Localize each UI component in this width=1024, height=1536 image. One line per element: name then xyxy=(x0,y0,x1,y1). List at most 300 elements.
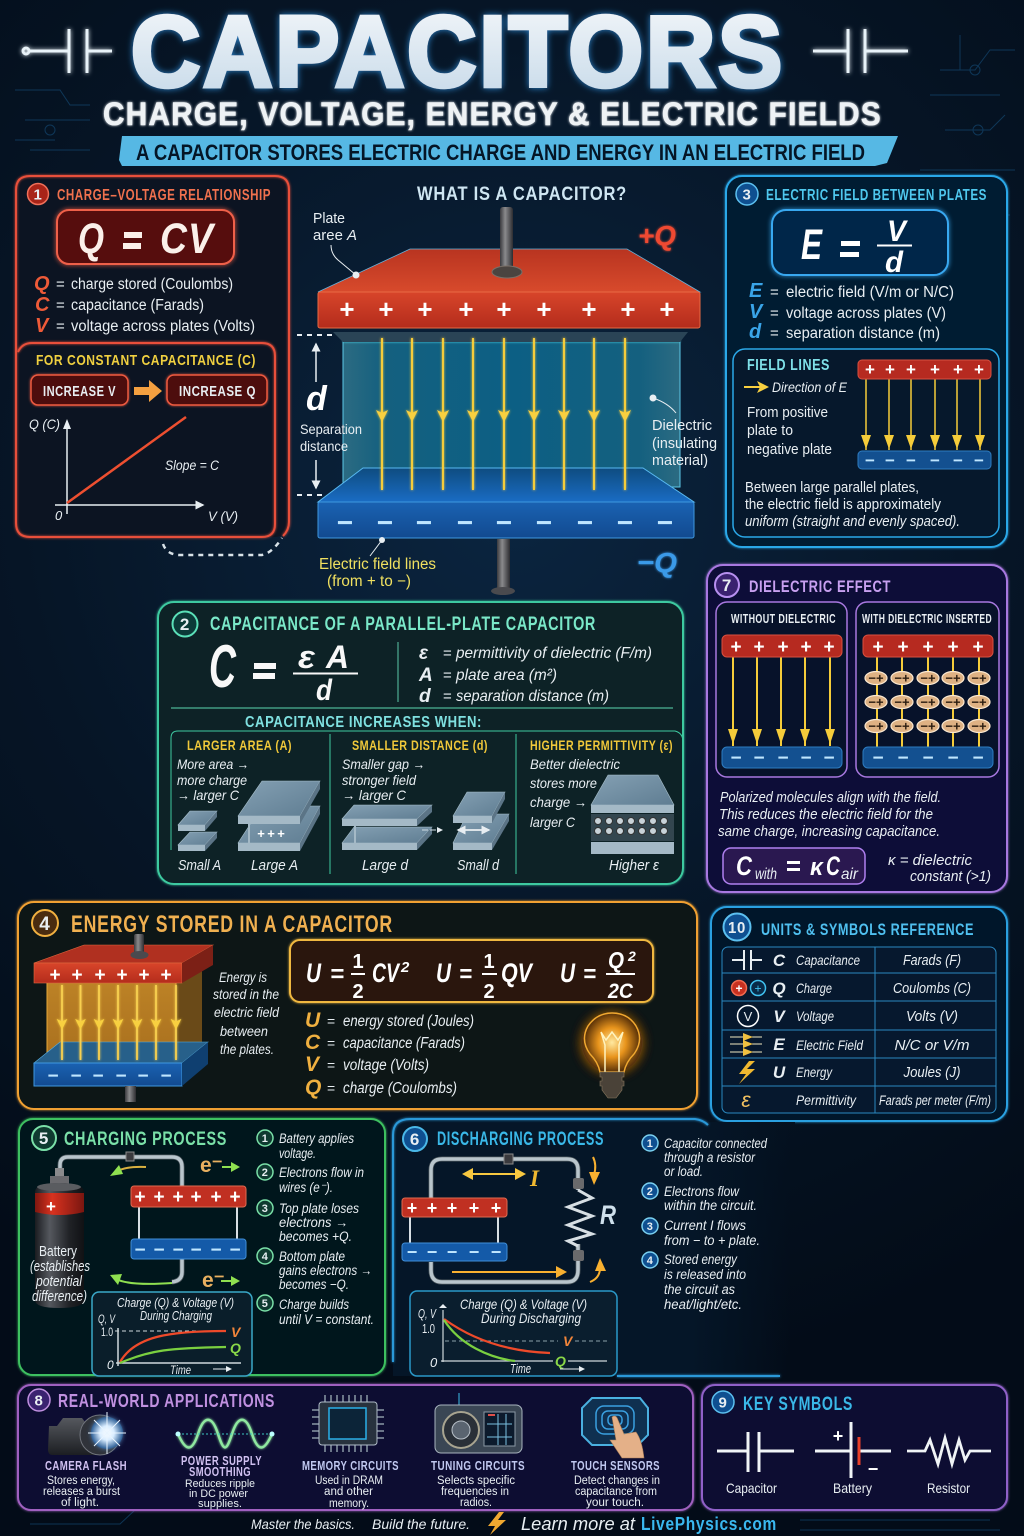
energy formulas: QV xyxy=(501,958,534,988)
polarized molecules: −+ xyxy=(920,694,936,710)
column: higher permittivity: stores more xyxy=(530,775,597,791)
application: memory circuits: memory. xyxy=(329,1498,369,1510)
row: voltage: V xyxy=(773,1007,786,1026)
application: camera flash: CAMERA FLASH xyxy=(45,1459,127,1473)
kappa note: κ = dielectric xyxy=(888,853,973,869)
discharging chart: Charge (Q) & Voltage (V) xyxy=(460,1296,587,1312)
row: capacitance: C xyxy=(773,951,786,970)
column: smaller distance: Large d xyxy=(362,857,409,874)
polarized molecules: −+ xyxy=(945,718,961,734)
application: power supply smoothing: POWER SUPPLY xyxy=(181,1454,262,1468)
separation distance marker: d xyxy=(306,380,328,418)
polarized molecules: −+ xyxy=(868,694,884,710)
number badge 2: 2 xyxy=(180,615,190,634)
separation distance marker: distance xyxy=(300,438,348,454)
polarized molecules: −+ xyxy=(894,670,910,686)
charging steps: wires (e⁻). xyxy=(279,1180,333,1195)
dielectric block xyxy=(333,332,688,487)
charging steps: 1 xyxy=(262,1133,268,1145)
heading: DIELECTRIC EFFECT xyxy=(749,577,891,596)
units table xyxy=(722,947,996,1113)
application: tuning circuits xyxy=(431,1393,525,1509)
application: tuning circuits: frequencies in xyxy=(441,1486,509,1498)
charging steps: Battery applies xyxy=(279,1131,354,1146)
column: larger area xyxy=(177,737,320,874)
row: permittivity xyxy=(741,1089,991,1112)
discharging chart: Q, V xyxy=(418,1306,437,1321)
charging steps: until V = constant. xyxy=(279,1312,374,1327)
polarized molecules: −+ xyxy=(894,718,910,734)
variable definitions: voltage across plates (Volts) xyxy=(71,318,255,335)
Q-V line chart xyxy=(29,416,238,524)
row: energy: Energy xyxy=(796,1064,833,1080)
variable definitions: energy stored (Joules) xyxy=(343,1013,474,1030)
number badge 1: 1 xyxy=(33,186,43,204)
column: smaller distance: Smaller gap → xyxy=(342,756,425,772)
formula C = eA/d: ε xyxy=(298,639,316,675)
plates with dielectric xyxy=(591,775,674,854)
variable definitions: ε xyxy=(419,643,429,664)
column: larger area: More area → xyxy=(177,756,249,772)
application: tuning circuits: TUNING CIRCUITS xyxy=(431,1459,525,1473)
application: camera flash xyxy=(43,1412,127,1509)
icon: battery xyxy=(30,1168,90,1308)
icon: memory chip xyxy=(312,1395,384,1452)
column: smaller distance: → larger C xyxy=(342,787,407,803)
symbol: resistor: Resistor xyxy=(927,1480,970,1496)
formula with dielectric: C xyxy=(826,851,840,881)
panel: 8 real-world applications xyxy=(18,1385,693,1510)
formula C = eA/d: C xyxy=(209,633,237,700)
Q-V line chart: V (V) xyxy=(208,508,238,524)
row: energy: U xyxy=(773,1063,786,1082)
electric field label: Electric field lines xyxy=(319,556,436,573)
variable definitions: = xyxy=(770,305,779,322)
large gap plates xyxy=(342,805,442,850)
symbol: resistor xyxy=(907,1438,991,1496)
field lines sub-panel xyxy=(733,349,999,537)
formula Q = CV: C xyxy=(160,215,188,263)
number badge 8: 8 xyxy=(34,1392,44,1410)
formula Q = CV: V xyxy=(188,215,216,263)
formula with dielectric: with xyxy=(755,866,777,883)
without dielectric diagram: WITHOUT DIELECTRIC xyxy=(731,612,836,626)
-Q label: −Q xyxy=(637,547,677,578)
panel: 7 dielectric effect xyxy=(707,565,1007,892)
symbol: battery xyxy=(815,1422,891,1496)
application: power supply smoothing: SMOOTHING xyxy=(189,1465,251,1479)
explanation: Polarized molecules align with the field. xyxy=(720,790,941,806)
discharging circuit: I xyxy=(529,1166,540,1191)
charging steps xyxy=(257,1130,374,1327)
dielectric label: material) xyxy=(652,452,708,469)
energy note: the plates. xyxy=(220,1041,274,1057)
polarized molecules: −+ xyxy=(920,718,936,734)
variable definitions xyxy=(749,280,954,343)
heading: WHAT IS A CAPACITOR? xyxy=(417,184,627,205)
charging steps: Charge builds xyxy=(279,1297,349,1312)
large plates: +++ xyxy=(257,826,285,841)
divider xyxy=(397,642,399,702)
formula with dielectric: κ xyxy=(810,854,824,881)
discharging steps: Capacitor connected xyxy=(664,1136,767,1151)
explanation xyxy=(718,790,941,840)
energy formulas: U xyxy=(560,958,576,988)
variable definitions: voltage across plates (V) xyxy=(786,305,946,322)
panel: what is a capacitor xyxy=(297,184,717,595)
small gap plates xyxy=(453,792,509,850)
increase V box: INCREASE V xyxy=(43,384,116,400)
number badge 6: 6 xyxy=(410,1130,420,1149)
number badge 10 xyxy=(724,914,750,940)
variable definitions: separation distance (m) xyxy=(786,325,940,342)
lower plate: −−−−−−−−− xyxy=(337,507,673,538)
charging steps: becomes −Q. xyxy=(279,1277,349,1292)
number badge 9 xyxy=(712,1391,734,1413)
charging chart: Q, V xyxy=(98,1312,116,1326)
discharging steps: within the circuit. xyxy=(664,1198,757,1213)
variable definitions: = xyxy=(770,284,779,301)
row: voltage: V xyxy=(744,1009,753,1024)
charging steps: voltage. xyxy=(279,1146,316,1161)
title block xyxy=(23,0,908,166)
number badge 7 xyxy=(715,573,739,597)
increase Q box xyxy=(167,375,267,405)
panel: 2 capacitance of parallel plate capacitor xyxy=(158,602,683,884)
variable definitions: permittivity of dielectric (F/m) xyxy=(455,645,652,662)
energy formulas: 2 xyxy=(352,981,364,1003)
discharging steps: Electrons flow xyxy=(664,1184,740,1199)
number badge 8 xyxy=(28,1389,50,1411)
increase Q box: INCREASE Q xyxy=(179,384,256,400)
electron flow arrows xyxy=(116,1167,146,1172)
row: electric field: E xyxy=(773,1035,785,1054)
energy note xyxy=(213,969,280,1057)
charging chart: 1.0 xyxy=(101,1327,113,1339)
variable definitions: = xyxy=(56,297,65,314)
application: power supply smoothing xyxy=(176,1420,274,1510)
discharging steps: through a resistor xyxy=(664,1150,755,1165)
Q-V line chart: Slope = C xyxy=(165,458,219,473)
charging chart: Q xyxy=(230,1340,241,1356)
discharging chart: 1.0 xyxy=(422,1321,435,1336)
banner: A CAPACITOR STORES ELECTRIC CHARGE AND ENERGY IN AN ELECTRIC FIELD xyxy=(136,140,865,165)
discharging steps: 1 xyxy=(647,1138,653,1150)
symbol: battery: Battery xyxy=(833,1480,872,1496)
charging circuit: e⁻ xyxy=(200,1154,223,1177)
icon: sine wave xyxy=(176,1420,274,1448)
symbol: battery: − xyxy=(868,1459,878,1479)
row: charge: + xyxy=(754,982,762,996)
energy formulas: 2 xyxy=(483,981,495,1003)
footer: Learn more at xyxy=(521,1514,636,1534)
energy formulas: 2C xyxy=(607,980,634,1003)
charging circuit xyxy=(60,1152,246,1292)
field lines sub-panel: Between large parallel plates, xyxy=(745,480,919,496)
amber capacitor illustration: ++++++ xyxy=(49,965,172,986)
variable definitions: = xyxy=(327,1057,335,1073)
variable definitions: E xyxy=(749,280,763,302)
polarized molecules xyxy=(865,670,990,734)
energy formulas: Q xyxy=(608,947,624,973)
polarized molecules: −+ xyxy=(920,670,936,686)
dielectric label: Dielectric xyxy=(652,417,712,434)
number badge 9: 9 xyxy=(718,1394,728,1412)
mini field diagram: ++++++ xyxy=(865,360,984,379)
plate area label: aree A xyxy=(313,227,357,244)
column: smaller distance: Small d xyxy=(457,857,500,874)
column: smaller distance xyxy=(342,737,509,874)
formula Q = CV xyxy=(57,210,234,264)
variable definitions xyxy=(418,643,652,707)
charging steps: 2 xyxy=(262,1167,268,1179)
increase V box xyxy=(31,375,128,405)
heading: KEY SYMBOLS xyxy=(743,1394,853,1415)
application: camera flash: releases a burst xyxy=(43,1486,121,1498)
icon: right capacitor symbol xyxy=(813,29,908,73)
row: energy: Joules (J) xyxy=(903,1065,960,1081)
row: charge: Charge xyxy=(796,980,832,996)
icon: touch sensor hand xyxy=(582,1398,648,1458)
Q-V line chart: 0 xyxy=(55,508,63,523)
application: touch sensors: capacitance from xyxy=(575,1486,657,1498)
separation distance marker: Separation xyxy=(300,421,362,437)
constant capacitance sub-panel xyxy=(29,352,267,524)
variable definitions: C xyxy=(35,294,50,316)
arrow xyxy=(134,380,162,402)
charging steps: Top plate loses xyxy=(279,1201,359,1216)
panel: 5 charging process xyxy=(19,1119,385,1377)
variable definitions: charge (Coulombs) xyxy=(343,1080,457,1097)
field lines sub-panel: From positive xyxy=(747,405,828,421)
formula with dielectric: C xyxy=(736,851,752,881)
number badge 4: 4 xyxy=(39,914,51,935)
row: energy xyxy=(739,1061,960,1084)
variable definitions: capacitance (Farads) xyxy=(343,1035,465,1052)
icon: camera xyxy=(48,1412,126,1455)
discharging chart xyxy=(410,1291,617,1376)
polarized molecules: −+ xyxy=(868,718,884,734)
discharging steps: Stored energy xyxy=(664,1252,738,1267)
variable definitions: Q xyxy=(305,1076,321,1099)
variable definitions: separation distance (m) xyxy=(456,688,609,705)
row: charge: Q xyxy=(772,979,786,998)
formula E = V/d xyxy=(772,210,948,279)
row: charge xyxy=(732,979,971,998)
energy formulas: 1 xyxy=(483,951,495,973)
column: higher permittivity xyxy=(530,737,674,874)
variable definitions: capacitance (Farads) xyxy=(71,297,204,314)
column: smaller distance: stronger field xyxy=(342,772,417,788)
variable definitions: A xyxy=(418,665,433,686)
variable definitions: Q xyxy=(34,273,50,295)
formula C = eA/d xyxy=(209,633,358,707)
plate area label xyxy=(313,210,360,278)
variable definitions: U xyxy=(305,1009,321,1032)
symbol: battery: + xyxy=(833,1426,843,1446)
constant capacitance sub-panel: FOR CONSTANT CAPACITANCE (C) xyxy=(36,352,256,369)
discharging steps: is released into xyxy=(664,1267,746,1282)
electric field label xyxy=(319,537,436,590)
discharging steps: 4 xyxy=(647,1255,654,1267)
row: capacitance xyxy=(732,950,961,970)
panel: 10 units and symbols reference xyxy=(711,907,1007,1121)
discharging chart: V xyxy=(563,1333,574,1349)
row: electric field: Electric Field xyxy=(796,1037,864,1053)
upper plate xyxy=(318,249,700,328)
large plates xyxy=(238,781,320,851)
field lines sub-panel: negative plate xyxy=(747,442,832,458)
discharging steps: Current I flows xyxy=(664,1218,746,1233)
row: permittivity: Farads per meter (F/m) xyxy=(879,1093,991,1108)
charging steps: Bottom plate xyxy=(279,1249,345,1264)
heading: DISCHARGING PROCESS xyxy=(437,1129,604,1150)
lower plate xyxy=(318,468,694,538)
panel: 6 discharging process xyxy=(393,1119,795,1376)
icon: battery: potential xyxy=(35,1274,83,1290)
charging steps: Electrons flow in xyxy=(279,1165,364,1180)
formula E = V/d: d xyxy=(885,246,904,279)
icon: battery: Battery xyxy=(39,1244,78,1260)
variable definitions: = xyxy=(443,667,452,684)
charging steps: becomes +Q. xyxy=(279,1229,352,1244)
column: higher permittivity: charge → xyxy=(530,794,587,810)
with dielectric diagram xyxy=(856,602,999,777)
heading: CAPACITANCE OF A PARALLEL-PLATE CAPACITOR xyxy=(210,614,596,635)
charging steps: 5 xyxy=(262,1298,268,1310)
energy formulas: U xyxy=(436,958,452,988)
field lines sub-panel: Direction of E xyxy=(772,379,848,395)
charging chart xyxy=(92,1292,252,1377)
discharging steps xyxy=(642,1135,767,1312)
icon: radio tuner xyxy=(435,1393,522,1453)
variable definitions: = xyxy=(327,1013,335,1029)
energy formulas: 1 xyxy=(352,951,364,973)
explanation: same charge, increasing capacitance. xyxy=(718,824,940,840)
energy note: electric field xyxy=(214,1004,280,1020)
polarized molecules: −+ xyxy=(894,694,910,710)
formula E = V/d: V xyxy=(887,215,909,248)
icon: battery: + xyxy=(46,1197,56,1216)
variable definitions: V xyxy=(35,315,50,337)
polarized molecules: −+ xyxy=(945,670,961,686)
heading: CHARGING PROCESS xyxy=(64,1129,227,1150)
column: larger area: → larger C xyxy=(177,787,240,803)
energy formulas: 2 xyxy=(627,948,636,964)
variable definitions: = xyxy=(443,645,452,662)
separation distance marker xyxy=(297,335,362,495)
kappa note: constant (>1) xyxy=(910,869,991,885)
field lines sub-panel: the electric field is approximately xyxy=(745,497,942,513)
row: electric field xyxy=(730,1033,970,1056)
amber capacitor illustration: −−−−−− xyxy=(47,1066,172,1087)
heading: ENERGY STORED IN A CAPACITOR xyxy=(71,911,393,938)
energy formulas: = xyxy=(583,961,596,988)
discharging steps: or load. xyxy=(664,1164,703,1179)
charging circuit: e⁻ xyxy=(202,1269,225,1292)
row: voltage: Volts (V) xyxy=(906,1009,958,1025)
polarized molecules: −+ xyxy=(945,694,961,710)
formula with dielectric xyxy=(723,848,865,884)
symbol: capacitor xyxy=(717,1432,794,1496)
lower terminal xyxy=(491,539,515,595)
variable definitions: V xyxy=(749,301,764,323)
discharging circuit xyxy=(402,1154,616,1282)
column: higher permittivity: Higher ε xyxy=(609,857,659,874)
with dielectric diagram: −−−−− xyxy=(872,748,984,769)
field lines sub-panel: FIELD LINES xyxy=(747,357,830,374)
panel: 3 electric field between plates xyxy=(726,176,1007,547)
subtitle: CHARGE, VOLTAGE, ENERGY & ELECTRIC FIELDS xyxy=(103,96,882,132)
number badge 6 xyxy=(403,1127,427,1151)
energy note: stored in the xyxy=(213,986,279,1002)
column: higher permittivity: larger C xyxy=(530,814,576,830)
discharging chart: 0 xyxy=(430,1355,438,1370)
energy formulas xyxy=(290,940,653,1003)
application: camera flash: of light. xyxy=(61,1497,99,1509)
polarized molecules: −+ xyxy=(868,670,884,686)
charging chart: V xyxy=(231,1324,242,1340)
without dielectric diagram: +++++ xyxy=(730,637,835,658)
factors frame xyxy=(171,731,683,874)
field lines sub-panel: plate to xyxy=(747,423,793,439)
resistor xyxy=(568,1190,592,1246)
discharging steps: 2 xyxy=(647,1186,653,1198)
+Q label: +Q xyxy=(638,220,676,251)
polarized molecules: −+ xyxy=(971,718,987,734)
upper terminal xyxy=(492,207,522,278)
panel: 1 charge-voltage relationship xyxy=(16,176,289,537)
column: larger area: Small A xyxy=(178,857,221,874)
variable definitions xyxy=(305,1009,474,1099)
application: power supply smoothing: supplies. xyxy=(198,1498,242,1510)
variable definitions: d xyxy=(419,686,431,707)
with dielectric diagram: +++++ xyxy=(872,637,984,658)
application: tuning circuits: Selects specific xyxy=(437,1475,515,1487)
dielectric label: (insulating xyxy=(652,435,717,452)
electric field lines xyxy=(382,338,625,490)
formula with dielectric: air xyxy=(841,866,859,883)
row: permittivity: ε xyxy=(741,1089,751,1112)
variable definitions: charge stored (Coulombs) xyxy=(71,276,233,293)
application: power supply smoothing: in DC power xyxy=(189,1488,248,1500)
discharging steps: heat/light/etc. xyxy=(664,1297,742,1312)
number badge 3: 3 xyxy=(742,186,752,204)
without dielectric diagram: −−−−− xyxy=(730,748,835,769)
footer: Build the future. xyxy=(372,1516,470,1532)
row: voltage xyxy=(738,1006,958,1026)
dielectric label xyxy=(650,394,717,469)
row: electric field: N/C or V/m xyxy=(894,1038,970,1054)
formula C = eA/d: A xyxy=(325,639,349,675)
charging circuit: ++++++ xyxy=(134,1187,241,1208)
energy formulas: CV xyxy=(372,958,400,988)
icon: light bulb xyxy=(582,1013,642,1098)
variable definitions: = xyxy=(56,318,65,335)
direction arrow xyxy=(744,386,765,388)
variable definitions: d xyxy=(749,321,762,343)
panel: 4 energy stored xyxy=(18,902,697,1109)
charging steps: 3 xyxy=(262,1203,268,1215)
variable definitions: = xyxy=(327,1080,335,1096)
polarized molecules: −+ xyxy=(971,694,987,710)
application: touch sensors: TOUCH SENSORS xyxy=(571,1459,660,1473)
application: touch sensors xyxy=(571,1398,660,1509)
energy note: between xyxy=(220,1023,268,1039)
energy formulas: 2 xyxy=(400,959,410,976)
column: smaller distance: SMALLER DISTANCE (d) xyxy=(352,737,488,753)
formula C = eA/d: d xyxy=(316,674,333,707)
